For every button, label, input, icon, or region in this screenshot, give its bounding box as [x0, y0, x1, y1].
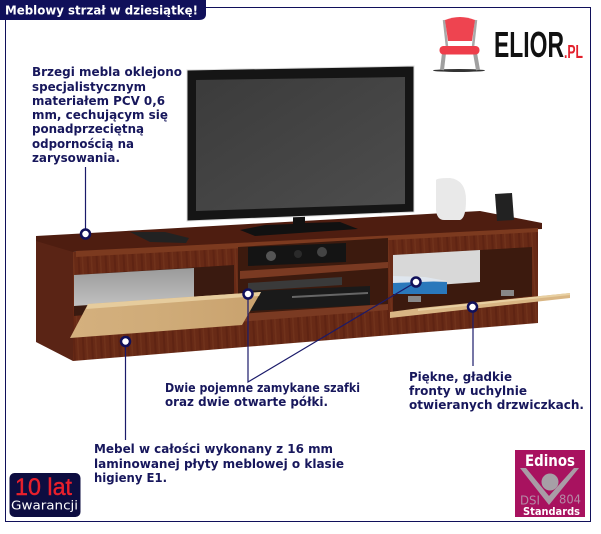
text: edges: mm, cechującym się	[32, 108, 168, 122]
remote control	[130, 232, 189, 243]
TV body	[187, 66, 414, 221]
text: material	[94, 442, 344, 485]
text: compartments: oraz dwie otwarte półki.	[165, 395, 328, 409]
text: edges	[32, 65, 182, 165]
text: fronts: fronty w uchylnie	[409, 384, 527, 398]
logo: Elior	[433, 17, 583, 72]
text: fronts: otwieranych drzwiczkach.	[409, 398, 584, 412]
middle shelves	[238, 238, 388, 322]
text: edges: specjalistycznym	[32, 80, 146, 94]
text: edges: materiałem PCV 0,6	[32, 94, 165, 108]
badge: Edinos standards	[515, 450, 585, 518]
badge: Edinos standards: DSI	[520, 494, 540, 508]
left compartment	[74, 265, 234, 316]
left open door	[70, 292, 261, 338]
callout lines	[86, 167, 473, 440]
black speaker	[495, 193, 514, 221]
badge: Edinos standards: Standards	[523, 505, 580, 518]
logo: Elior: .PL	[564, 42, 583, 62]
text: edges: ponadprzeciętną	[32, 122, 144, 136]
TV stand	[240, 214, 358, 236]
TV set	[187, 66, 414, 236]
text: fronts: Piękne, gładkie	[409, 370, 512, 384]
text: edges: zarysowania.	[32, 151, 120, 165]
soundbar	[248, 243, 346, 266]
blue device	[393, 280, 447, 294]
callout dots	[81, 230, 477, 346]
title tab: Meblowy strzał w dziesiątkę!	[5, 4, 198, 18]
cabinet top	[36, 211, 542, 252]
text: material: laminowanej płyty meblowej o klasie	[94, 457, 344, 471]
badge: Edinos standards: Edinos	[525, 451, 575, 470]
cabinet side	[36, 236, 73, 361]
badge: 10 years warranty: 10 lat	[15, 474, 72, 501]
white speaker	[436, 178, 466, 220]
DVD player	[248, 277, 342, 291]
badge: Edinos standards: 804	[559, 492, 581, 506]
TV screen	[196, 77, 405, 211]
badge: 10 years warranty: Gwarancji	[11, 498, 78, 512]
text: edges: Brzegi mebla oklejono	[32, 65, 182, 79]
text: edges: odpornością na	[32, 137, 134, 151]
cabinet front	[73, 226, 538, 361]
right open door	[390, 293, 570, 318]
text: compartments: Dwie pojemne zamykane szafki	[165, 381, 360, 395]
TV cabinet	[36, 178, 570, 361]
title tab	[0, 0, 206, 20]
text: material: Mebel w całości wykonany z 16 mm	[94, 442, 333, 456]
icon: red chair	[433, 17, 485, 72]
text: compartments	[165, 381, 360, 409]
hinges	[408, 296, 421, 302]
wordmark: ELIOR	[494, 24, 564, 65]
text: fronts	[409, 370, 584, 412]
right compartment	[393, 247, 532, 312]
text: material: higieny E1.	[94, 471, 167, 485]
badge: 10 years warranty	[10, 473, 80, 517]
